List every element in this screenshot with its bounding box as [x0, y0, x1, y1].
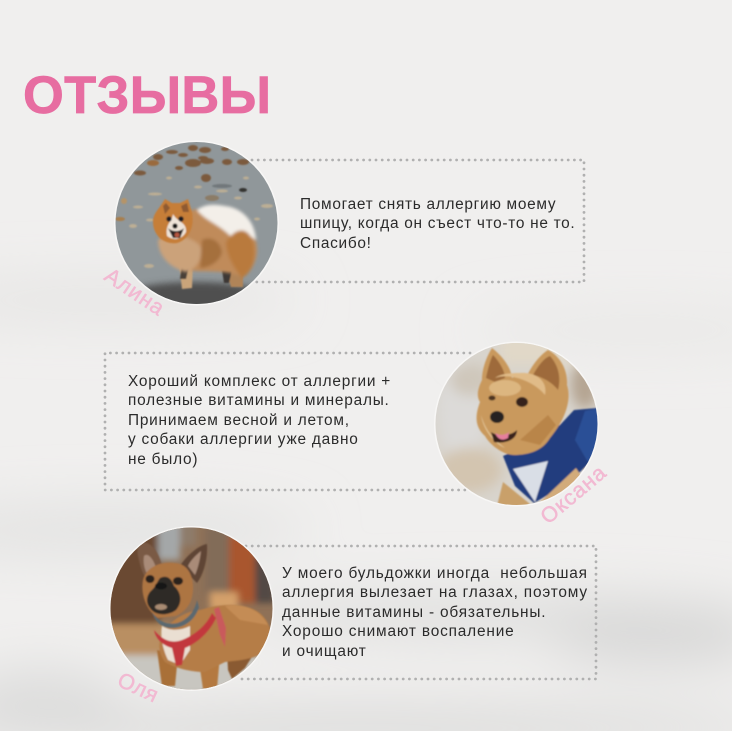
head and ears	[477, 348, 569, 455]
review text: Оксана: у собаки аллергии уже давно	[128, 431, 359, 448]
head	[153, 199, 193, 243]
review text: Оля: данные витамины - обязательны.	[282, 604, 546, 621]
photo: French bulldog	[110, 526, 274, 691]
review text: Алина: Спасибо!	[300, 235, 372, 252]
name: Оксана: Оксана	[536, 460, 611, 529]
name: Алина: Алина	[100, 263, 169, 321]
review text: Оля: аллергия вылезает на глазах, поэтому	[282, 584, 588, 601]
dotted frame: review 1	[250, 160, 584, 282]
review text: Оксана: полезные витамины и минералы.	[128, 392, 390, 409]
photo: Yorkshire terrier	[436, 342, 598, 505]
body	[160, 207, 257, 277]
review text: Оля: Хорошо снимают воспаление	[282, 623, 515, 640]
jacket	[503, 408, 600, 503]
review text: Оля	[282, 565, 588, 660]
review text: Алина	[300, 196, 575, 252]
review text: Алина: шпицу, когда он съест что-то не то.	[300, 215, 575, 232]
review text: Оксана: Принимаем весной и летом,	[128, 412, 350, 429]
review text: Оксана: не было)	[128, 451, 198, 468]
review text: Оксана	[128, 373, 391, 468]
review text: Оксана: Хороший комплекс от аллергии +	[128, 373, 391, 390]
photo: Pomeranian	[114, 142, 278, 306]
dotted frame: review 3	[236, 546, 596, 679]
review text: Оля: и очищают	[282, 643, 367, 660]
review text: Алина: Помогает снять аллергию моему	[300, 196, 556, 213]
harness	[154, 613, 216, 666]
collar	[152, 600, 199, 628]
name: Оля: Оля	[114, 668, 163, 707]
legs	[180, 268, 194, 290]
ears	[138, 542, 162, 575]
head	[142, 563, 193, 618]
dotted frame: review 2	[105, 353, 470, 490]
review text: Оля: У моего бульдожки иногда небольшая	[282, 565, 588, 582]
legs	[157, 650, 178, 686]
title: ОТЗЫВЫ	[23, 66, 271, 125]
body	[159, 605, 271, 672]
